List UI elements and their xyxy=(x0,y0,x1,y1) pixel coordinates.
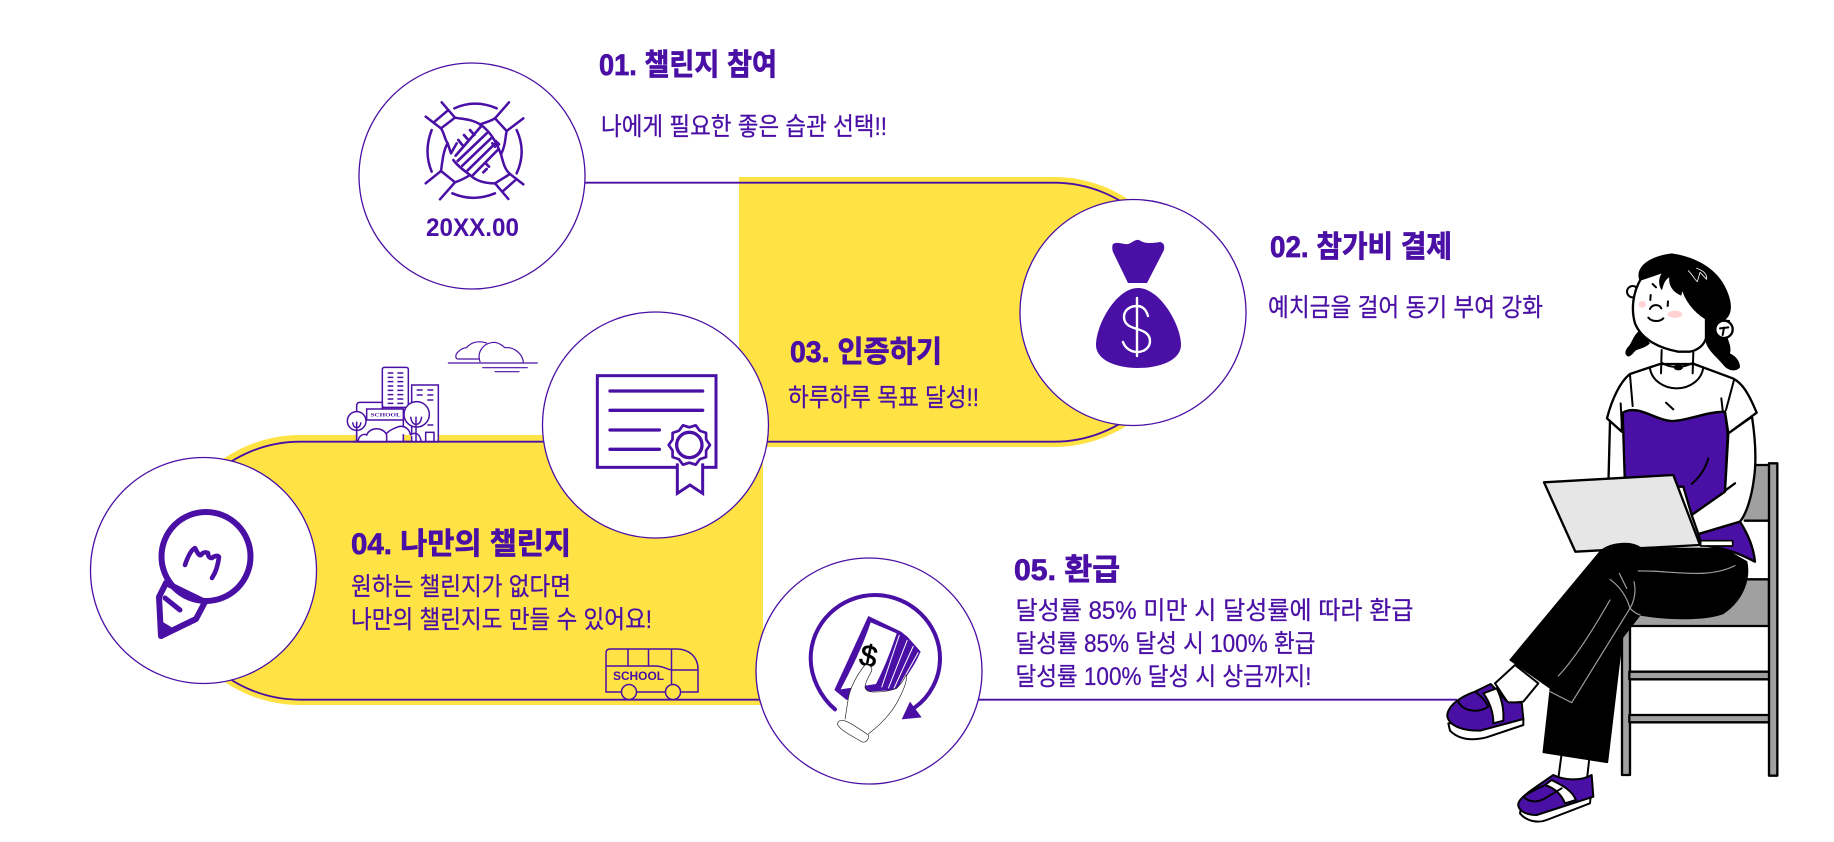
step 04 heading: 04. 나만의 챌린지 xyxy=(351,528,571,561)
panel: yellow band for step 03 xyxy=(739,177,1189,447)
step 01 circle xyxy=(359,63,585,289)
icon: light bulb pen xyxy=(159,512,250,636)
icon: money bag xyxy=(1096,240,1181,368)
step 02 heading: 02. 참가비 결제 xyxy=(1270,231,1452,264)
shoe: planted foot xyxy=(1518,775,1593,822)
step 02 description: 예치금을 걸어 동기 부여 강화 xyxy=(1268,294,1543,322)
icon: school bus xyxy=(606,649,698,700)
icon: school and buildings xyxy=(347,367,439,442)
step 05 description: 달성률 85% 미만 시 달성률에 따라 환급 xyxy=(1016,597,1414,625)
step 03 description: 하루하루 목표 달성!! xyxy=(788,384,979,412)
step 04 circle xyxy=(90,458,316,684)
icon: certificate xyxy=(597,376,716,493)
icon: cash in hand with refund arrow: $ xyxy=(857,638,880,675)
step 05 description: 달성률 85% 달성 시 100% 환급 xyxy=(1016,630,1316,658)
connector line linking all steps xyxy=(171,183,1457,700)
step 05 circle xyxy=(756,558,982,784)
shoe: raised foot xyxy=(1447,684,1523,739)
step 03 circle xyxy=(542,312,768,538)
head and hair xyxy=(1625,253,1740,373)
step 04 description: 원하는 챌린지가 없다면 xyxy=(351,573,571,601)
step 04 description xyxy=(351,573,652,634)
step 01 heading: 01. 챌린지 참여 xyxy=(599,49,777,82)
icon: cloud xyxy=(448,342,537,372)
icon: joined hands xyxy=(426,102,523,199)
chair xyxy=(1622,463,1777,776)
icon: cash in hand with refund arrow xyxy=(811,595,940,742)
icon: school bus: SCHOOL xyxy=(613,671,664,683)
date label: 20XX.00 xyxy=(426,214,519,242)
torso and arms xyxy=(1607,364,1757,562)
laptop xyxy=(1544,475,1700,552)
icon: school and buildings: SCHOOL xyxy=(371,413,401,419)
step 01 description: 나에게 필요한 좋은 습관 선택!! xyxy=(601,113,887,141)
step 05 heading: 05. 환급 xyxy=(1014,554,1120,587)
step 05 description xyxy=(1016,597,1414,691)
panel: yellow band for step 04 xyxy=(165,435,763,705)
step 05 description: 달성률 100% 달성 시 상금까지! xyxy=(1016,663,1312,691)
step 04 description: 나만의 챌린지도 만들 수 있어요! xyxy=(351,606,652,634)
step 02 circle xyxy=(1020,200,1246,426)
illustration: woman sitting with laptop xyxy=(1447,253,1777,822)
step 03 heading: 03. 인증하기 xyxy=(790,336,942,369)
legs and trousers xyxy=(1447,544,1748,822)
